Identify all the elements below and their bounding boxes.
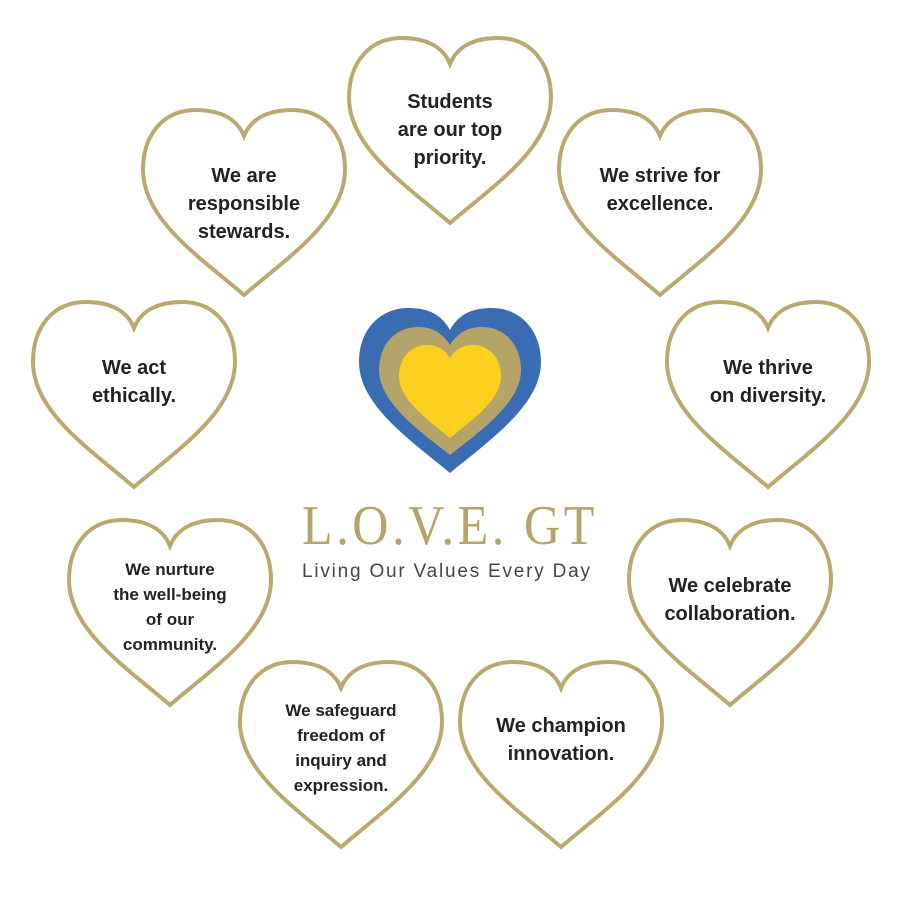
heart: collaboration bbox=[629, 520, 831, 705]
heart: safeguard: expression. bbox=[294, 776, 388, 795]
heart: safeguard: We safeguard bbox=[285, 701, 397, 720]
center logo heart bbox=[359, 308, 541, 473]
heart: stewards: We are bbox=[211, 165, 277, 187]
heart: collaboration: collaboration. bbox=[664, 603, 796, 625]
heart: excellence bbox=[559, 110, 761, 295]
heart: diversity bbox=[667, 302, 869, 487]
heart: diversity: on diversity. bbox=[710, 385, 826, 407]
heart: ethical bbox=[33, 302, 235, 487]
heart: ethical: We act bbox=[102, 357, 166, 379]
subtitle: Living Our Values Every Day bbox=[302, 561, 590, 582]
heart: stewards bbox=[143, 110, 345, 295]
heart: nurture: We nurture bbox=[125, 560, 215, 579]
title: L.O.V.E. GT bbox=[302, 495, 598, 557]
heart: innovation: innovation. bbox=[508, 743, 614, 765]
heart: excellence: excellence. bbox=[607, 193, 713, 215]
heart: excellence: We strive for bbox=[600, 165, 721, 187]
heart: students bbox=[349, 38, 551, 223]
heart: nurture: the well-being bbox=[113, 585, 227, 604]
heart: ethical: ethically. bbox=[92, 385, 176, 407]
heart: students: Students bbox=[407, 91, 493, 113]
heart: stewards: stewards. bbox=[198, 221, 290, 243]
heart: safeguard: freedom of bbox=[297, 726, 385, 745]
heart: students: priority. bbox=[414, 147, 486, 169]
heart: students: are our top bbox=[398, 119, 502, 141]
heart: nurture bbox=[69, 520, 271, 705]
heart: stewards: responsible bbox=[188, 193, 300, 215]
heart: safeguard: inquiry and bbox=[295, 751, 387, 770]
heart: innovation bbox=[460, 662, 662, 847]
heart: diversity: We thrive bbox=[723, 357, 813, 379]
heart: nurture: of our bbox=[146, 610, 194, 629]
heart: safeguard bbox=[240, 662, 442, 847]
heart: collaboration: We celebrate bbox=[668, 575, 792, 597]
heart: innovation: We champion bbox=[496, 715, 626, 737]
heart: nurture: community. bbox=[123, 635, 217, 654]
